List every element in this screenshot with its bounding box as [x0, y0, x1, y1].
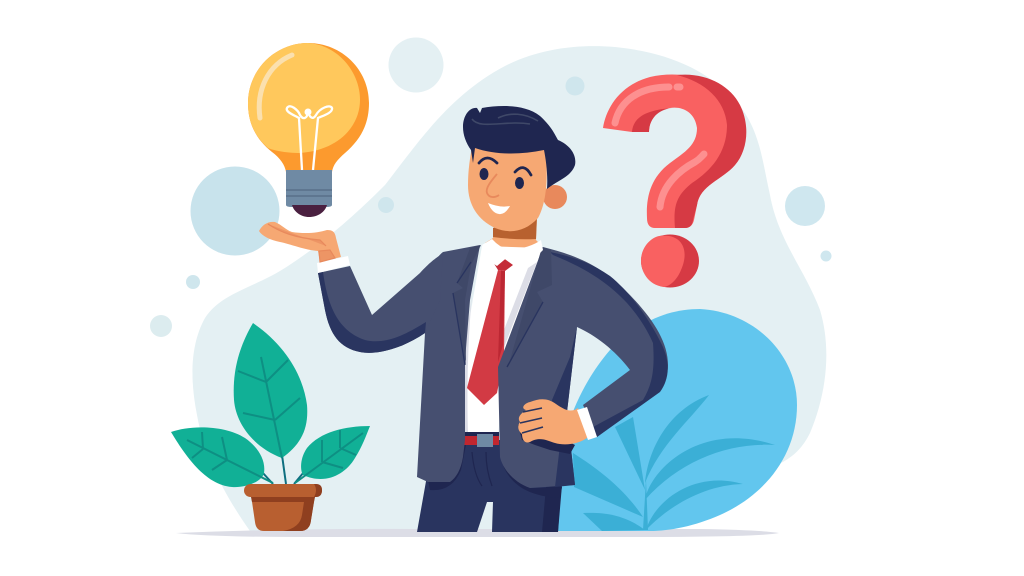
bulb inner glow [248, 43, 360, 153]
background blob [192, 46, 826, 531]
decorative circles [150, 38, 832, 337]
foliage leaves [573, 395, 775, 531]
question mark highlights [615, 87, 704, 207]
hip hand [518, 399, 588, 444]
face [468, 145, 547, 231]
bulb cap [292, 205, 327, 217]
ear [543, 185, 567, 209]
shirt shading [462, 262, 537, 432]
question mark stem [603, 75, 745, 228]
hip cuff [577, 407, 597, 440]
jacket left panel [417, 245, 480, 482]
trousers [417, 440, 562, 532]
jacket right panel [498, 247, 668, 488]
raised arm [318, 253, 443, 353]
left leaf [171, 427, 273, 487]
right leaf [295, 426, 370, 483]
light bulb [248, 43, 369, 217]
belt [461, 432, 499, 447]
eyebrows [479, 158, 531, 175]
blue circle with foliage [558, 309, 797, 531]
question mark dot [641, 234, 699, 288]
plant stems [262, 455, 304, 484]
bulb glass [248, 43, 369, 172]
jacket side shading [552, 327, 577, 487]
eyes [480, 168, 524, 189]
jacket right shading [550, 252, 668, 437]
hip hand shadow [518, 425, 575, 454]
shirt [462, 246, 543, 435]
head [463, 106, 575, 231]
nose [487, 174, 499, 197]
centre leaf [234, 323, 307, 458]
bulb screw base [286, 170, 332, 207]
palm hand holding bulb [259, 222, 341, 262]
hair [463, 106, 575, 189]
question mark shading [632, 75, 746, 228]
screw threads [286, 190, 332, 196]
smile [488, 203, 510, 214]
left lapel [453, 245, 481, 365]
right lapel [508, 247, 552, 367]
ground shadow [176, 529, 779, 537]
businessman [259, 106, 668, 532]
question mark [603, 75, 746, 287]
neck shadow [493, 216, 537, 239]
hip hand finger lines [520, 408, 543, 433]
filament [287, 106, 332, 170]
raised arm cuff [317, 256, 350, 273]
raised arm shading [318, 272, 426, 353]
hair highlights [472, 114, 538, 124]
bulb highlight [259, 55, 292, 118]
tie [467, 257, 513, 405]
pot [244, 484, 322, 531]
jacket [318, 245, 668, 488]
shirt collar [482, 239, 543, 272]
neck [485, 216, 541, 254]
plant in pot [171, 323, 370, 531]
